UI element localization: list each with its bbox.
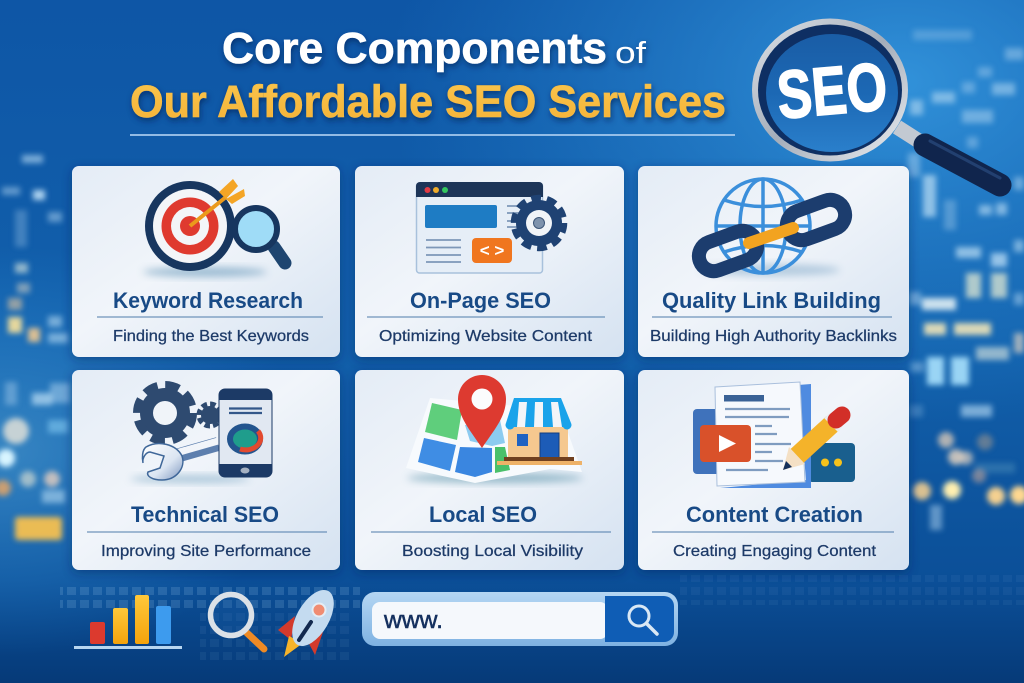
title: Our Affordable SEO Services	[130, 76, 726, 127]
subtitle: Creating Engaging Content	[673, 543, 877, 560]
icon: gears, wrench and phone	[130, 386, 272, 483]
subtitle: Optimizing Website Content	[379, 328, 593, 345]
icon: SEO magnifying glass	[752, 18, 1000, 185]
subtitle: Boosting Local Visibility	[402, 543, 583, 560]
heading: Keyword Research	[113, 288, 303, 313]
icon: rocket	[278, 583, 342, 657]
search bar	[362, 592, 678, 646]
icon: map, pin and storefront	[406, 375, 583, 483]
panel: Quality Link Building	[638, 166, 909, 357]
icon: globe and chain links	[695, 179, 849, 276]
heading: Local SEO	[429, 502, 537, 527]
heading: Technical SEO	[131, 502, 279, 527]
subtitle: Improving Site Performance	[101, 543, 311, 560]
address text: www.	[383, 607, 443, 634]
icon: SEO magnifying glass: SEO	[774, 48, 890, 134]
icon: bar chart	[74, 595, 182, 649]
icon: document, video and pencil	[693, 382, 855, 488]
panel: Keyword Research	[72, 166, 340, 357]
icon: browser window and gear	[416, 182, 564, 273]
icon: target with arrow and magnifier	[143, 179, 285, 277]
icon: search	[629, 606, 657, 634]
panel: Technical SEO	[72, 370, 340, 570]
title: Core Components	[222, 24, 607, 73]
title	[130, 24, 726, 127]
panel: On-Page SEO	[355, 166, 624, 357]
icon: browser window and gear: < >	[480, 241, 504, 260]
panel: Content Creation	[638, 370, 909, 570]
heading: Content Creation	[686, 502, 863, 527]
panel: Local SEO	[355, 370, 624, 570]
heading: Quality Link Building	[662, 288, 881, 313]
icon: magnifying glass	[210, 594, 264, 649]
subtitle: Finding the Best Keywords	[113, 328, 309, 345]
heading: On-Page SEO	[410, 288, 551, 313]
title: of	[615, 35, 646, 70]
subtitle: Building High Authority Backlinks	[650, 328, 897, 345]
